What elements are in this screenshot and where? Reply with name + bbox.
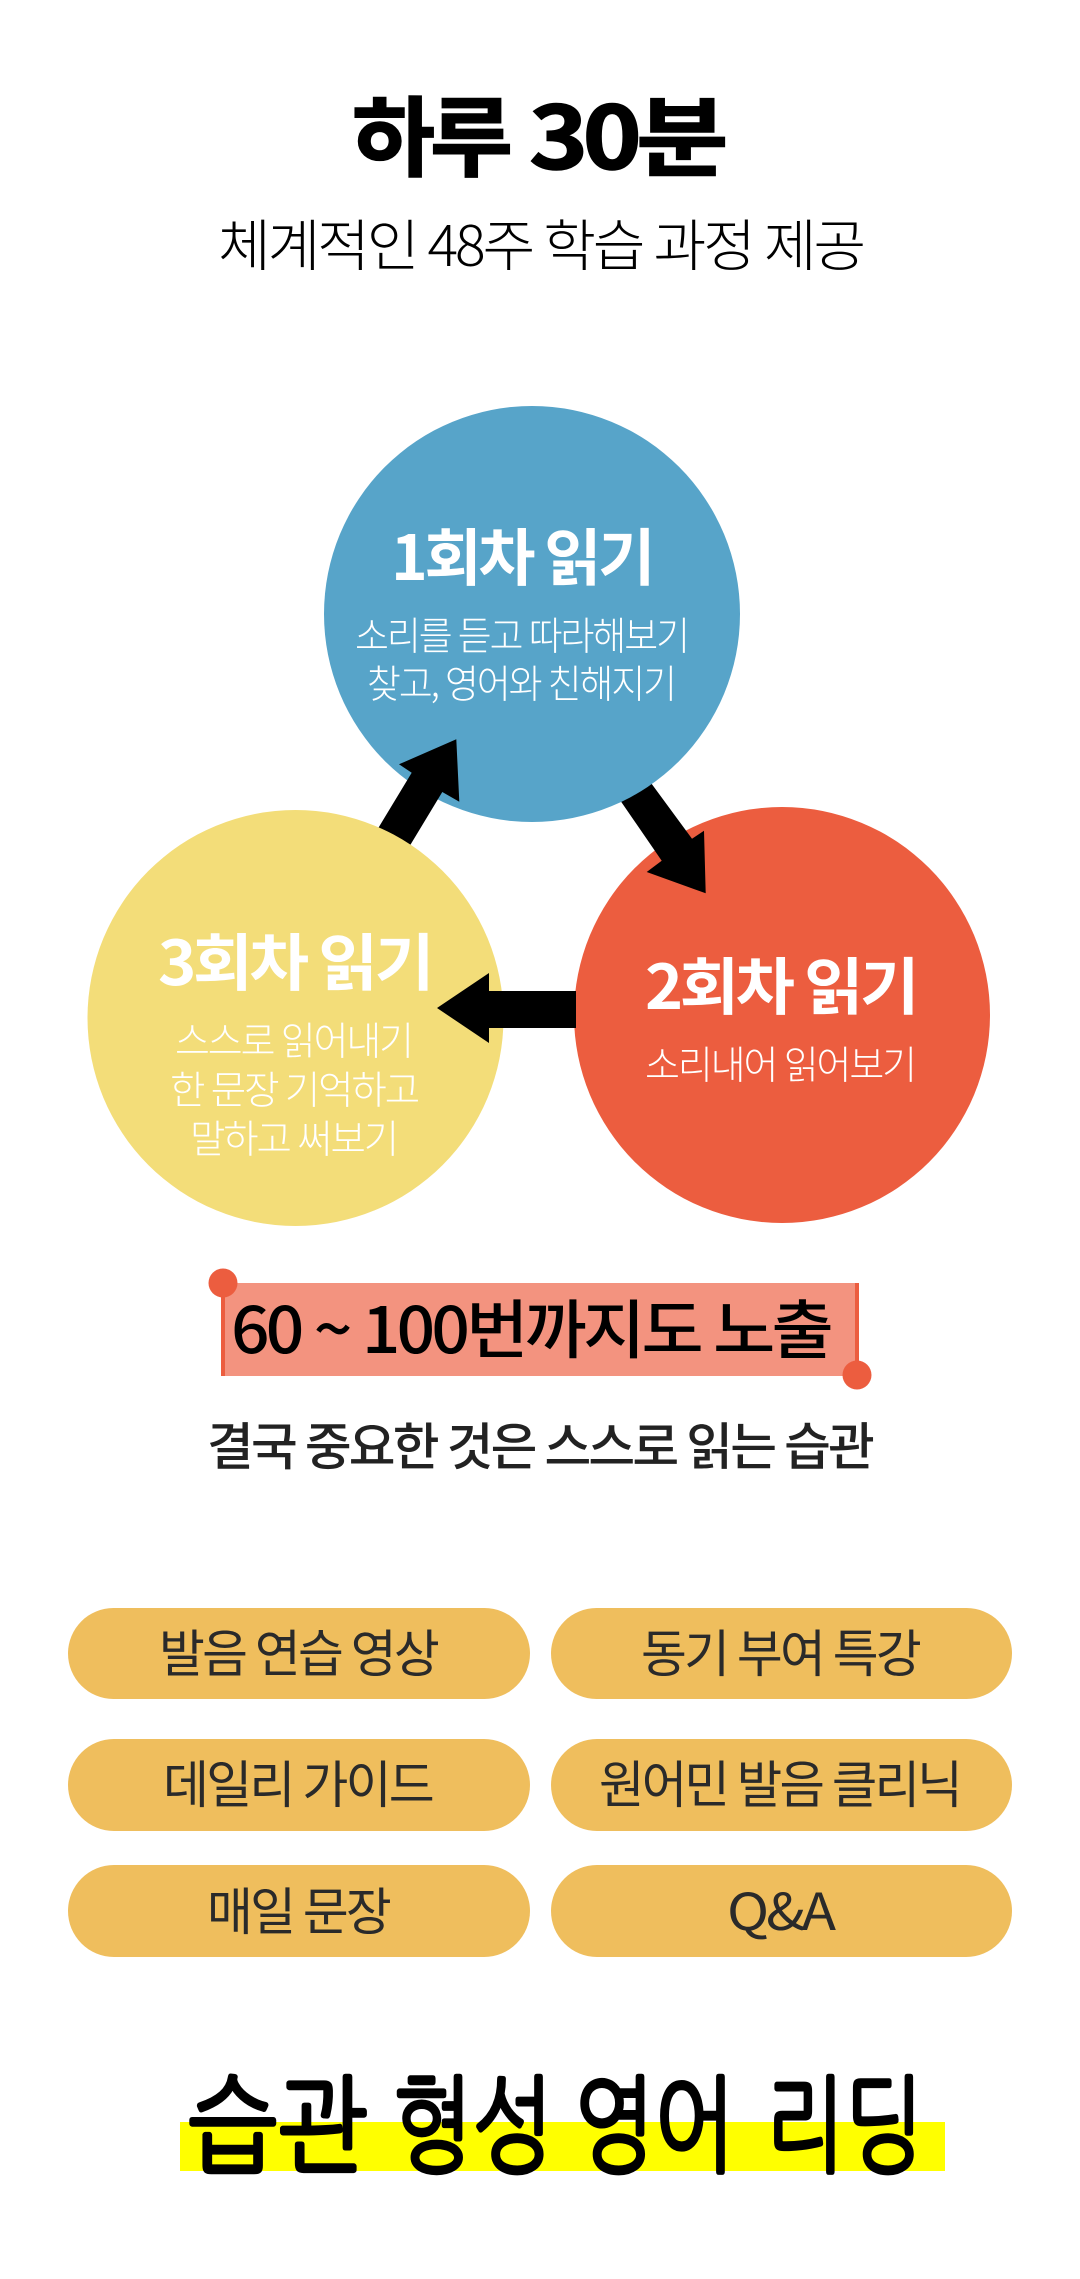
callout: highlighted exposure count: 60 ~ 100번까지도 노출 (231, 1280, 831, 1372)
panel: 1st reading text (355, 508, 688, 710)
pill: pronunciation video (68, 1608, 530, 1699)
panel: 2nd reading text: 2회차 읽기 (645, 937, 916, 1027)
circle: 2nd reading background (574, 807, 990, 1223)
panel: 1st reading text: 소리를 듣고 따라해보기 (355, 606, 688, 662)
title (352, 69, 725, 195)
circle: 3rd reading background (88, 810, 504, 1226)
pill: daily guide: 데일리 가이드 (163, 1744, 433, 1818)
arrow: 3rd to 1st reading (368, 739, 459, 862)
pill: daily guide (68, 1739, 530, 1831)
pill: native pronunciation clinic: 원어민 발음 클리닉 (599, 1744, 960, 1818)
circle: 1st reading background (324, 406, 740, 822)
panel: 1st reading text: 1회차 읽기 (391, 508, 652, 598)
heading: highlighted closing line: 영어 (574, 2073, 735, 2179)
text: key message: 결국 중요한 것은 스스로 읽는 습관 (207, 1406, 874, 1480)
heading: highlighted closing line: 형성 (392, 2073, 553, 2179)
panel: 3rd reading text: 3회차 읽기 (158, 913, 431, 1003)
panel: 2nd reading text (645, 937, 916, 1091)
pill: native pronunciation clinic (551, 1739, 1012, 1831)
panel: 3rd reading text: 말하고 써보기 (190, 1109, 397, 1165)
heading: highlighted closing line: 습관 (188, 2073, 367, 2179)
title: 30분 (529, 69, 725, 195)
pill: Q&A: Q&A (727, 1871, 836, 1945)
arrow: 1st to 2nd reading (611, 768, 706, 893)
callout: highlighted exposure count (208, 1268, 872, 1390)
pill: daily sentence: 매일 문장 (207, 1871, 391, 1945)
title: 하루 (352, 69, 510, 195)
panel: 1st reading text: 찾고, 영어와 친해지기 (367, 654, 675, 710)
subtitle: 체계적인 48주 학습 과정 제공 (218, 202, 864, 283)
pill: pronunciation video: 발음 연습 영상 (159, 1613, 439, 1687)
panel: 3rd reading text: 스스로 읽어내기 (175, 1011, 412, 1067)
pill: motivation lecture (551, 1608, 1012, 1699)
heading: highlighted closing line: 리딩 (766, 2073, 923, 2179)
panel: 2nd reading text: 소리내어 읽어보기 (645, 1035, 915, 1091)
heading: highlighted closing line (180, 2073, 945, 2179)
pill: motivation lecture: 동기 부여 특강 (641, 1613, 921, 1687)
arrow: 2nd to 3rd reading (437, 973, 576, 1043)
pill: Q&A (551, 1865, 1012, 1957)
panel: 3rd reading text: 한 문장 기억하고 (170, 1060, 418, 1116)
pill: daily sentence (68, 1865, 530, 1957)
panel: 3rd reading text (158, 913, 431, 1165)
